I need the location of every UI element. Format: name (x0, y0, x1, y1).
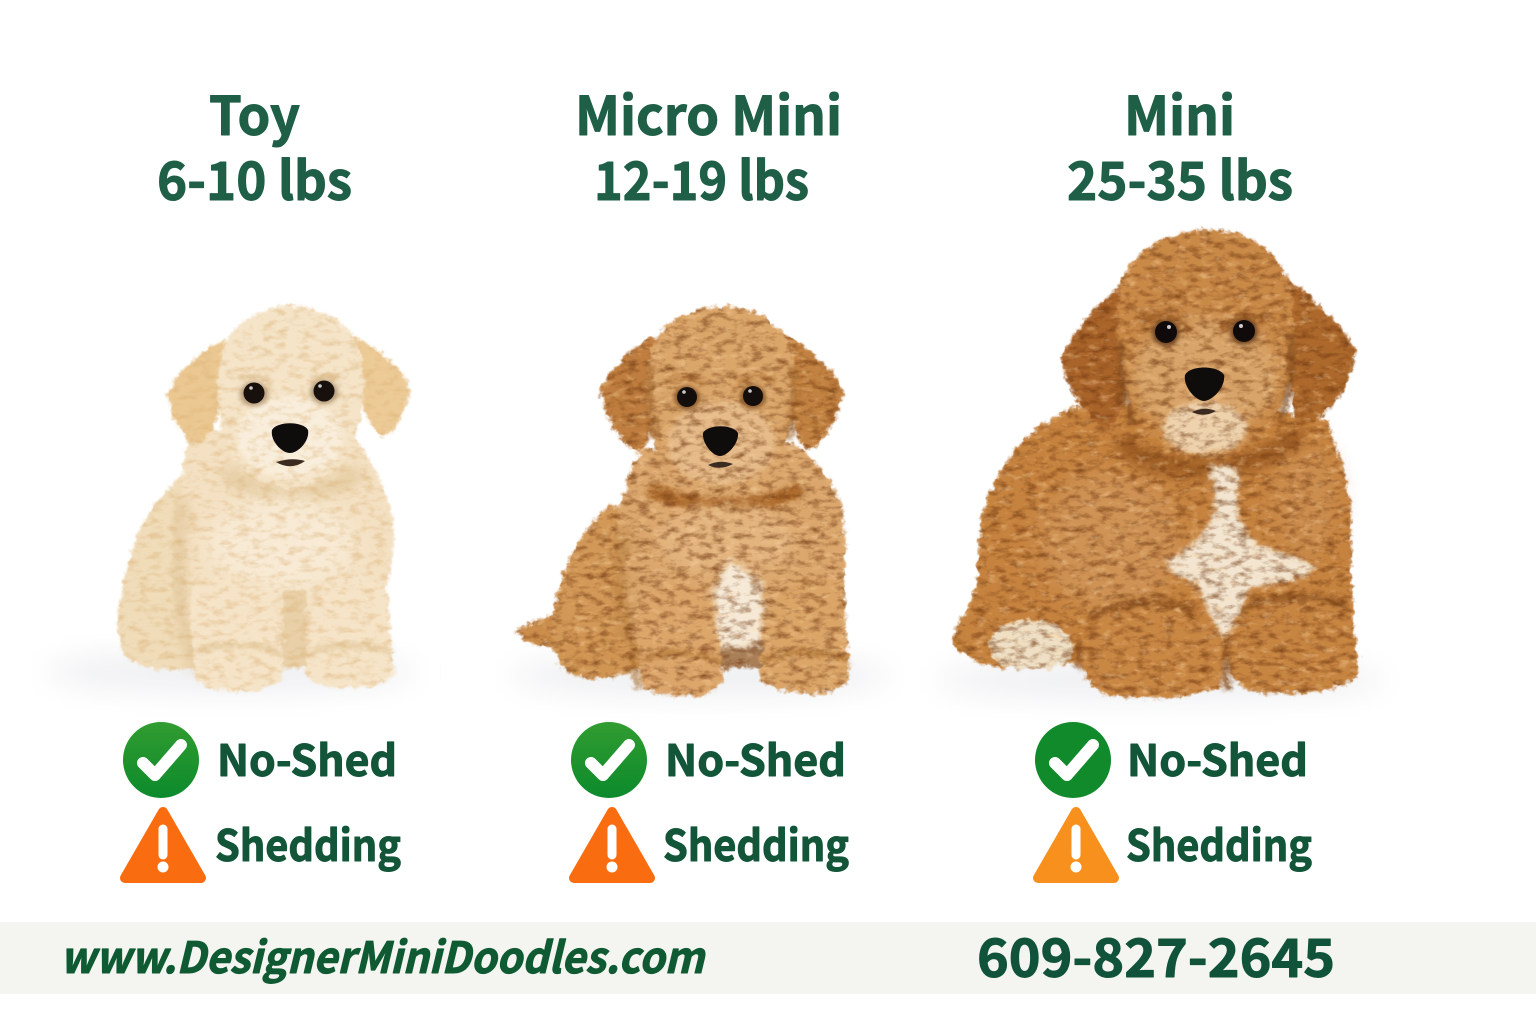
back haunch (118, 470, 235, 669)
title: Mini: 25-35 lbs (1067, 140, 1293, 216)
eyes and nose (1152, 319, 1258, 415)
shading between haunch and torso (620, 530, 640, 668)
label: No-Shed, Toy: No-Shed (217, 727, 397, 789)
chest fluff (655, 504, 795, 576)
left front paw (1082, 603, 1223, 698)
shading between haunch and torso (179, 500, 196, 668)
title: Mini (1067, 75, 1293, 216)
chest fluff (208, 499, 356, 591)
icon: check circle, Micro Mini (571, 722, 647, 798)
right front leg (305, 575, 394, 688)
right ear (778, 330, 843, 450)
right ear (1272, 268, 1356, 424)
body (952, 400, 1354, 667)
left ear (600, 330, 668, 450)
title: Micro Mini: Micro Mini (575, 75, 842, 151)
left back foot (556, 630, 632, 678)
title: Toy (157, 75, 352, 216)
tail (515, 614, 558, 648)
neck ruff (650, 488, 802, 504)
puppy: red mini (952, 230, 1358, 698)
label: No-Shed, Mini: No-Shed (1127, 727, 1308, 789)
torso (616, 445, 845, 665)
white chest (1165, 464, 1318, 640)
icon: check circle, Mini (1035, 722, 1111, 798)
left ear (1062, 272, 1142, 428)
label: Shedding, Toy: Shedding (215, 812, 401, 874)
muzzle (1163, 402, 1247, 454)
neck shadow (1120, 430, 1300, 469)
footer band (0, 922, 1536, 994)
label: Shedding, Micro Mini: Shedding (663, 812, 849, 874)
head (647, 307, 795, 490)
muzzle (238, 397, 342, 477)
torso (175, 430, 394, 665)
leg seams (197, 644, 390, 655)
title: Micro Mini (575, 75, 842, 216)
body side highlight (1275, 445, 1335, 555)
belly between legs (283, 590, 306, 668)
ear seams (650, 365, 793, 440)
right front leg (760, 576, 850, 693)
puppy: apricot micro mini (515, 307, 850, 696)
title: Mini: Mini (1124, 75, 1235, 151)
icon: warning triangle, Toy (125, 812, 201, 878)
puppy: cream toy (118, 306, 410, 692)
paw seams (1078, 597, 1345, 690)
brow shading (1140, 316, 1272, 330)
label: Shedding, Mini: Shedding (1126, 812, 1312, 874)
face (1131, 317, 1279, 433)
belly shadow (720, 640, 765, 668)
icon: warning triangle, Mini (1038, 812, 1114, 878)
back haunch (552, 505, 665, 678)
left front leg (636, 583, 723, 696)
head (217, 306, 364, 488)
title: Toy: Toy (209, 75, 300, 151)
right ear (350, 335, 410, 437)
right front paw (1229, 595, 1358, 693)
title: Micro Mini: 12-19 lbs (594, 140, 809, 216)
brow shading (240, 375, 340, 382)
cream back paw (990, 620, 1073, 669)
icon: check circle, Toy (123, 722, 199, 798)
label: No-Shed, Micro Mini: No-Shed (665, 727, 846, 789)
chest shadow under the chin (225, 470, 360, 492)
head (1116, 230, 1294, 458)
phone number: 609-827-2645 (977, 917, 1335, 993)
eyes and nose (674, 385, 766, 468)
ground shadows (45, 652, 1385, 700)
left front leg (190, 574, 283, 692)
eyes and nose (240, 380, 338, 466)
left ear (168, 340, 226, 443)
muzzle (667, 401, 775, 485)
icon: warning triangle, Micro Mini (574, 812, 650, 878)
title: Toy: 6-10 lbs (157, 140, 352, 216)
body highlight (1040, 470, 1180, 610)
website: www.DesignerMiniDoodles.com (60, 924, 706, 986)
leg seams (633, 650, 848, 688)
brow shading (668, 377, 775, 385)
ear seams (1121, 335, 1291, 425)
white chest (714, 560, 764, 649)
